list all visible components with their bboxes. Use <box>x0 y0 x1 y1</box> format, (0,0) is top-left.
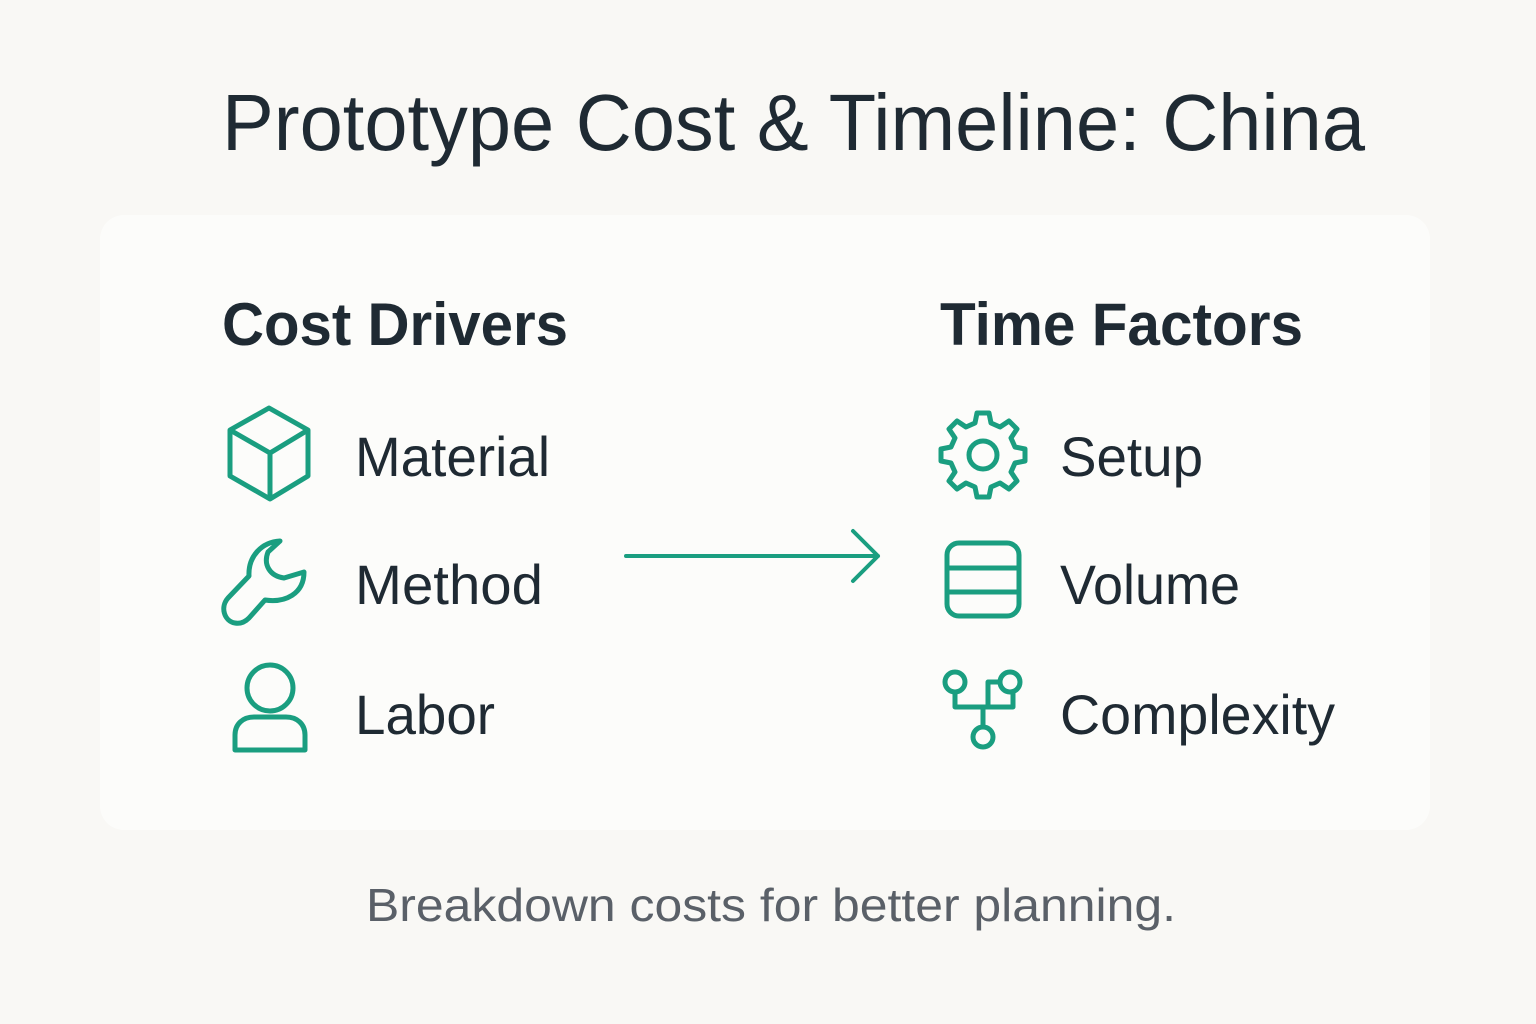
panel: main card <box>100 215 1430 830</box>
icon: person <box>235 665 305 750</box>
icon: wrench <box>224 541 304 623</box>
heading: time factors: Time Factors <box>940 291 1303 358</box>
text: material: Material <box>355 425 550 488</box>
heading: cost drivers: Cost Drivers <box>222 291 568 358</box>
icon: complexity <box>945 672 1020 747</box>
arrow <box>626 531 878 581</box>
text: complexity: Complexity <box>1060 683 1335 746</box>
footer text: Breakdown costs for better planning. <box>366 879 1176 931</box>
icon: volume layers <box>947 543 1019 616</box>
icon: gear <box>941 413 1025 497</box>
text: method: Method <box>355 553 543 616</box>
icon: cube <box>230 408 308 499</box>
text: labor: Labor <box>355 683 495 746</box>
text: setup: Setup <box>1060 425 1203 488</box>
text: volume: Volume <box>1060 553 1240 616</box>
title: Prototype Cost & Timeline: China <box>222 78 1365 167</box>
